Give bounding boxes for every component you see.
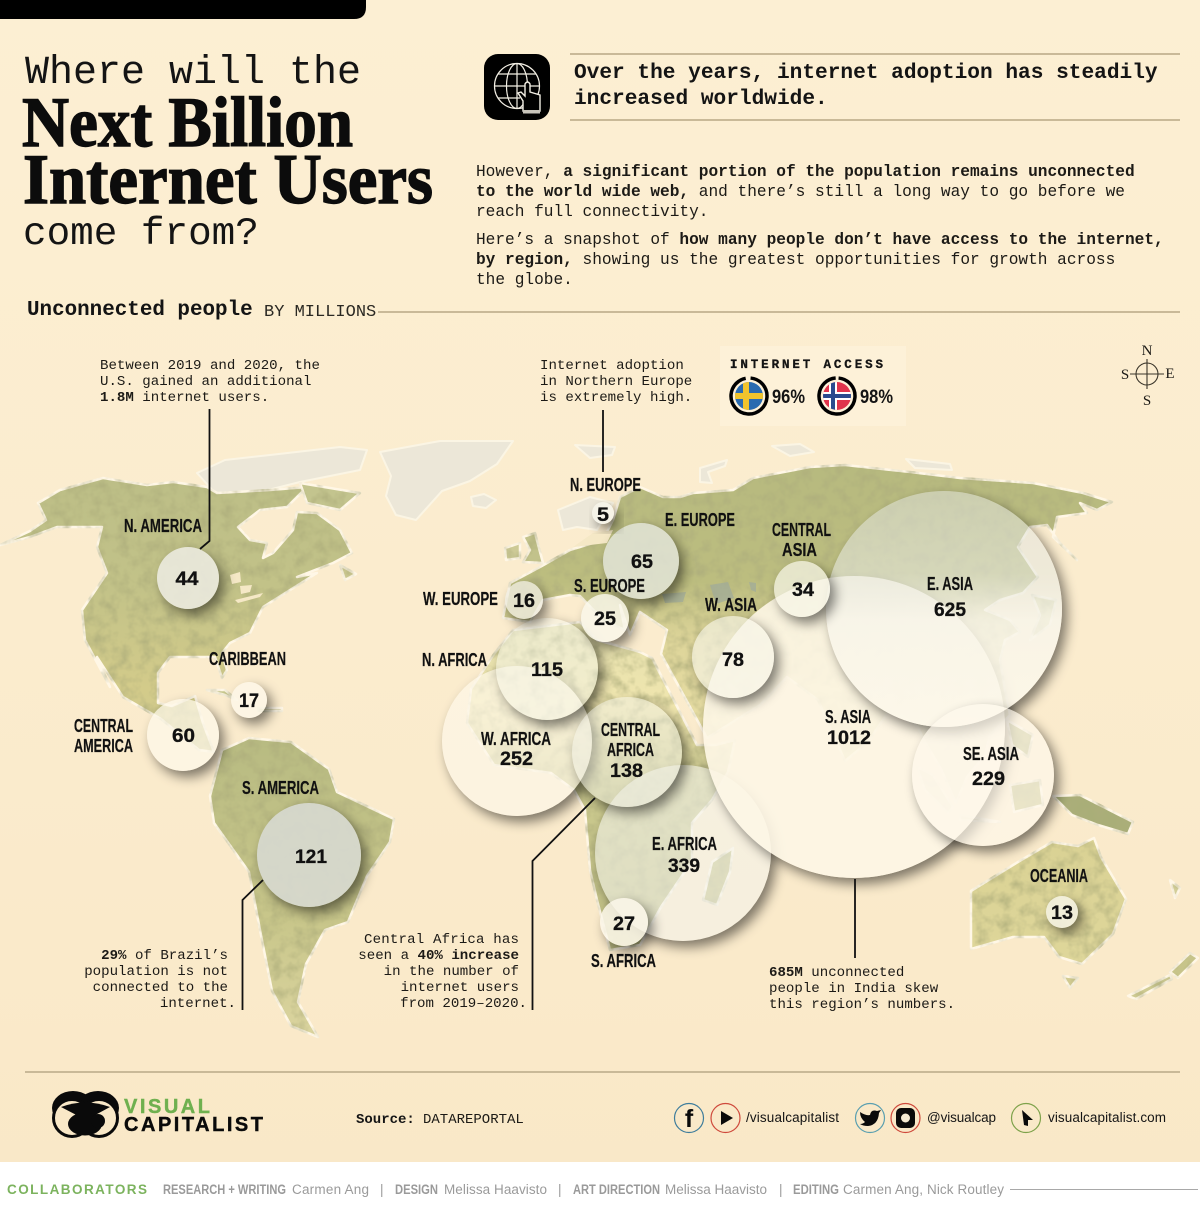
label: S. Asia 1012: S. ASIA xyxy=(825,707,871,727)
intro paragraph 1: to the world wide web, and there’s still a long way to go before we xyxy=(476,183,1125,201)
icon: youtube xyxy=(711,1104,740,1132)
footer: collaborators: | xyxy=(380,1182,384,1197)
label: W. Asia 78: W. ASIA xyxy=(705,595,757,615)
label: N. America 44: N. AMERICA xyxy=(124,516,202,536)
bubble: South America xyxy=(257,803,361,907)
label: W. Asia 78: 78 xyxy=(722,650,744,671)
callout: Central Africa: internet users xyxy=(401,980,519,996)
source: Source: xyxy=(356,1112,415,1128)
callout: U.S.: U.S. gained an additional xyxy=(100,374,311,390)
bubble: Central Asia xyxy=(774,561,830,617)
bubble: Central America xyxy=(147,699,219,771)
footer: collaborators: DESIGN xyxy=(395,1182,438,1197)
compass: S xyxy=(1143,393,1151,409)
logo: Visual Capitalist xyxy=(52,1091,263,1136)
logo: Visual Capitalist: VISUAL xyxy=(124,1096,210,1118)
title: come from? xyxy=(23,211,259,256)
callout: Central Africa: Central Africa has xyxy=(364,932,519,948)
label: W. Africa 252: W. AFRICA xyxy=(481,729,551,749)
top black bar xyxy=(0,0,366,19)
South America land xyxy=(210,738,394,1037)
label: E. Africa 339 xyxy=(652,834,717,877)
label: Central America 60: AMERICA xyxy=(74,736,133,756)
label: Oceania 13: 13 xyxy=(1051,903,1073,924)
intro callout xyxy=(570,54,1180,120)
title: Next Billion xyxy=(22,84,353,162)
legend: internet access: 96% xyxy=(772,387,805,408)
Africa land xyxy=(467,622,735,950)
callout: U.S.: Between 2019 and 2020, the xyxy=(100,358,320,374)
icon: website cursor xyxy=(1012,1104,1040,1132)
label: E. Europe 65: E. EUROPE xyxy=(665,510,735,530)
label: E. Europe 65 xyxy=(631,510,735,573)
label: W. Europe 16: W. EUROPE xyxy=(423,589,498,609)
label: S. Africa 27: S. AFRICA xyxy=(591,951,656,971)
icon: twitter xyxy=(856,1104,884,1132)
icon: facebook: f xyxy=(685,1105,694,1133)
callout: Central Africa: seen a 40% increase xyxy=(358,948,519,964)
bubble: Western Europe xyxy=(505,581,543,619)
icon: Sweden flag xyxy=(729,376,769,416)
bubble: South Asia xyxy=(703,576,1005,878)
footer: collaborators: Melissa Haavisto xyxy=(444,1182,547,1197)
legend: internet access: INTERNET ACCESS xyxy=(730,358,883,372)
Southeast Asia and Oceania land xyxy=(917,767,953,813)
label: S. Africa 27 xyxy=(591,914,656,971)
intro callout: Over the years, internet adoption has steadily xyxy=(574,61,1158,85)
callout: Brazil: population is not xyxy=(84,964,228,980)
callout: India: this region’s numbers. xyxy=(769,997,955,1013)
label: Central America 60: 60 xyxy=(172,726,195,747)
bubble: Central Africa xyxy=(572,697,682,807)
label: N. Europe 5: 5 xyxy=(597,505,609,526)
footer: collaborators: Carmen Ang xyxy=(292,1182,369,1197)
label: N. Europe 5 xyxy=(570,475,641,526)
bubble: Eastern Europe xyxy=(603,523,679,599)
callout: India xyxy=(769,965,955,1013)
source: DATAREPORTAL xyxy=(423,1112,524,1128)
intro paragraph 2: the globe. xyxy=(476,271,573,289)
bubbles xyxy=(147,491,1078,946)
social links: /visualcapitalist xyxy=(746,1110,839,1125)
callout: U.S. xyxy=(100,358,320,406)
label: Central Africa 138: CENTRAL xyxy=(601,720,660,740)
callout: Northern Europe: is extremely high. xyxy=(540,390,692,406)
intro paragraph 1: reach full connectivity. xyxy=(476,203,708,221)
bubble: North Africa xyxy=(496,618,598,720)
label: E. Asia 625: E. ASIA xyxy=(927,574,973,594)
footer: collaborators: ART DIRECTION xyxy=(573,1182,660,1197)
legend: internet access: 98% xyxy=(860,387,893,408)
label: E. Asia 625: 625 xyxy=(934,600,966,621)
label: Caribbean 17 xyxy=(209,649,286,712)
label: N. Africa 115 xyxy=(422,650,563,681)
bubble: Southern Europe xyxy=(581,594,629,642)
lakes xyxy=(230,530,613,603)
compass xyxy=(1121,343,1175,409)
label: Central Asia 34: ASIA xyxy=(782,540,817,560)
label: Oceania 13 xyxy=(1030,866,1088,924)
label: S. America 121: 121 xyxy=(295,847,327,868)
callout: India: people in India skew xyxy=(769,981,939,997)
bubble: South Africa xyxy=(600,898,648,946)
label: W. Europe 16: 16 xyxy=(513,591,535,612)
bubble: North America xyxy=(157,547,219,609)
callout: Brazil xyxy=(84,948,236,1012)
label: SE. Asia 229: 229 xyxy=(972,769,1005,790)
social links xyxy=(674,1104,1166,1133)
bubble: Oceania xyxy=(1046,896,1078,928)
compass: E xyxy=(1165,366,1175,382)
callout: Central Africa xyxy=(358,932,527,1012)
compass: S xyxy=(1121,367,1129,383)
intro paragraph 1 xyxy=(476,163,1135,221)
inland seas xyxy=(662,582,756,604)
Eurasia land xyxy=(503,465,1112,803)
callout: Brazil: 29% of Brazil’s xyxy=(101,948,228,964)
chart heading xyxy=(27,299,1180,322)
label: S. Europe 25: S. EUROPE xyxy=(574,576,645,596)
footer: collaborators: COLLABORATORS xyxy=(7,1182,147,1197)
footer: collaborators: | xyxy=(558,1182,562,1197)
footer: collaborators xyxy=(0,1162,1200,1220)
label: SE. Asia 229 xyxy=(963,744,1019,790)
icon: globe with pointing hand xyxy=(484,54,550,120)
icon: instagram xyxy=(891,1104,920,1132)
chart heading: Unconnected people xyxy=(27,299,253,322)
callout: Central Africa: from 2019–2020. xyxy=(400,996,527,1012)
label: Central America 60 xyxy=(74,716,195,756)
title xyxy=(22,51,433,256)
bubble: West Asia xyxy=(692,616,774,698)
logo: Visual Capitalist: CAPITALIST xyxy=(124,1114,263,1136)
label: Central America 60: CENTRAL xyxy=(74,716,133,736)
label: SE. Asia 229: SE. ASIA xyxy=(963,744,1019,764)
label: N. Africa 115: 115 xyxy=(531,660,563,681)
label: N. America 44: 44 xyxy=(176,569,199,590)
label: Central Asia 34 xyxy=(772,520,831,601)
label: S. Asia 1012 xyxy=(825,707,871,749)
footer: collaborators: EDITING xyxy=(793,1182,839,1197)
label: S. Asia 1012: 1012 xyxy=(827,728,871,749)
label: E. Africa 339: E. AFRICA xyxy=(652,834,717,854)
social links: visualcapitalist.com xyxy=(1048,1110,1166,1125)
callout: Brazil: connected to the xyxy=(93,980,228,996)
label: Central Africa 138: AFRICA xyxy=(607,740,654,760)
legend: internet access xyxy=(720,359,906,426)
source xyxy=(356,1112,524,1128)
label: Central Africa 138: 138 xyxy=(610,761,643,782)
footer: collaborators: RESEARCH + WRITING xyxy=(163,1182,286,1197)
label: N. Europe 5: N. EUROPE xyxy=(570,475,641,495)
label: W. Africa 252: 252 xyxy=(500,749,533,770)
callout: Central Africa: in the number of xyxy=(384,964,519,980)
callout: Northern Europe xyxy=(540,358,692,406)
footer: collaborators: Carmen Ang, Nick Routley xyxy=(843,1182,1004,1197)
label: Oceania 13: OCEANIA xyxy=(1030,866,1088,886)
leader lines xyxy=(200,409,855,1010)
callout: Northern Europe: in Northern Europe xyxy=(540,374,692,390)
label: N. Africa 115: N. AFRICA xyxy=(422,650,487,670)
bubble: East Africa xyxy=(595,765,771,941)
label: W. Asia 78 xyxy=(705,595,757,671)
bubble: Southeast Asia xyxy=(912,704,1054,846)
callout: India: 685M unconnected xyxy=(769,965,904,981)
callout: U.S.: 1.8M internet users. xyxy=(100,390,269,406)
footer: collaborators: | xyxy=(779,1182,783,1197)
compass: N xyxy=(1142,343,1153,359)
label: Central Asia 34: CENTRAL xyxy=(772,520,831,540)
title: Internet Users xyxy=(23,141,433,219)
North America land xyxy=(0,478,352,752)
label: E. Europe 65: 65 xyxy=(631,552,653,573)
label: S. America 121 xyxy=(242,778,327,868)
label: N. America 44 xyxy=(124,516,202,590)
label: Caribbean 17: 17 xyxy=(239,691,259,712)
bubble: Northern Europe xyxy=(592,502,614,524)
intro callout: increased worldwide. xyxy=(574,87,828,111)
British Isles xyxy=(523,533,543,563)
label: E. Africa 339: 339 xyxy=(668,856,700,877)
icon: Norway flag xyxy=(817,376,857,416)
intro paragraph 2 xyxy=(476,231,1164,289)
world map xyxy=(0,441,1198,1037)
chart heading: BY MILLIONS xyxy=(264,303,376,322)
title: Where will the xyxy=(25,51,361,96)
label: S. America 121: S. AMERICA xyxy=(242,778,319,798)
label: E. Asia 625 xyxy=(927,574,973,621)
bubble: Caribbean xyxy=(231,682,267,718)
footer: collaborators: Melissa Haavisto xyxy=(665,1182,767,1197)
label: Central Asia 34: 34 xyxy=(792,580,814,601)
label: Caribbean 17: CARIBBEAN xyxy=(209,649,286,669)
intro paragraph 1: However, a significant portion of the population remains unconnected xyxy=(476,163,1135,181)
bubble: East Asia xyxy=(826,491,1062,727)
callout: Brazil: internet. xyxy=(160,996,236,1012)
label: S. Africa 27: 27 xyxy=(613,914,635,935)
label: S. Europe 25: 25 xyxy=(594,609,616,630)
intro paragraph 2: Here’s a snapshot of how many people don’t have access to the internet, xyxy=(476,231,1164,249)
label: S. Europe 25 xyxy=(574,576,645,630)
bubble: West Africa xyxy=(442,666,592,816)
social links: @visualcap xyxy=(927,1110,996,1125)
label: W. Africa 252 xyxy=(481,729,551,770)
icon: facebook xyxy=(674,1104,704,1133)
intro paragraph 2: by region, showing us the greatest opportunities for growth across xyxy=(476,251,1115,269)
label: Central Africa 138 xyxy=(601,720,660,782)
callout: Northern Europe: Internet adoption xyxy=(540,358,684,374)
